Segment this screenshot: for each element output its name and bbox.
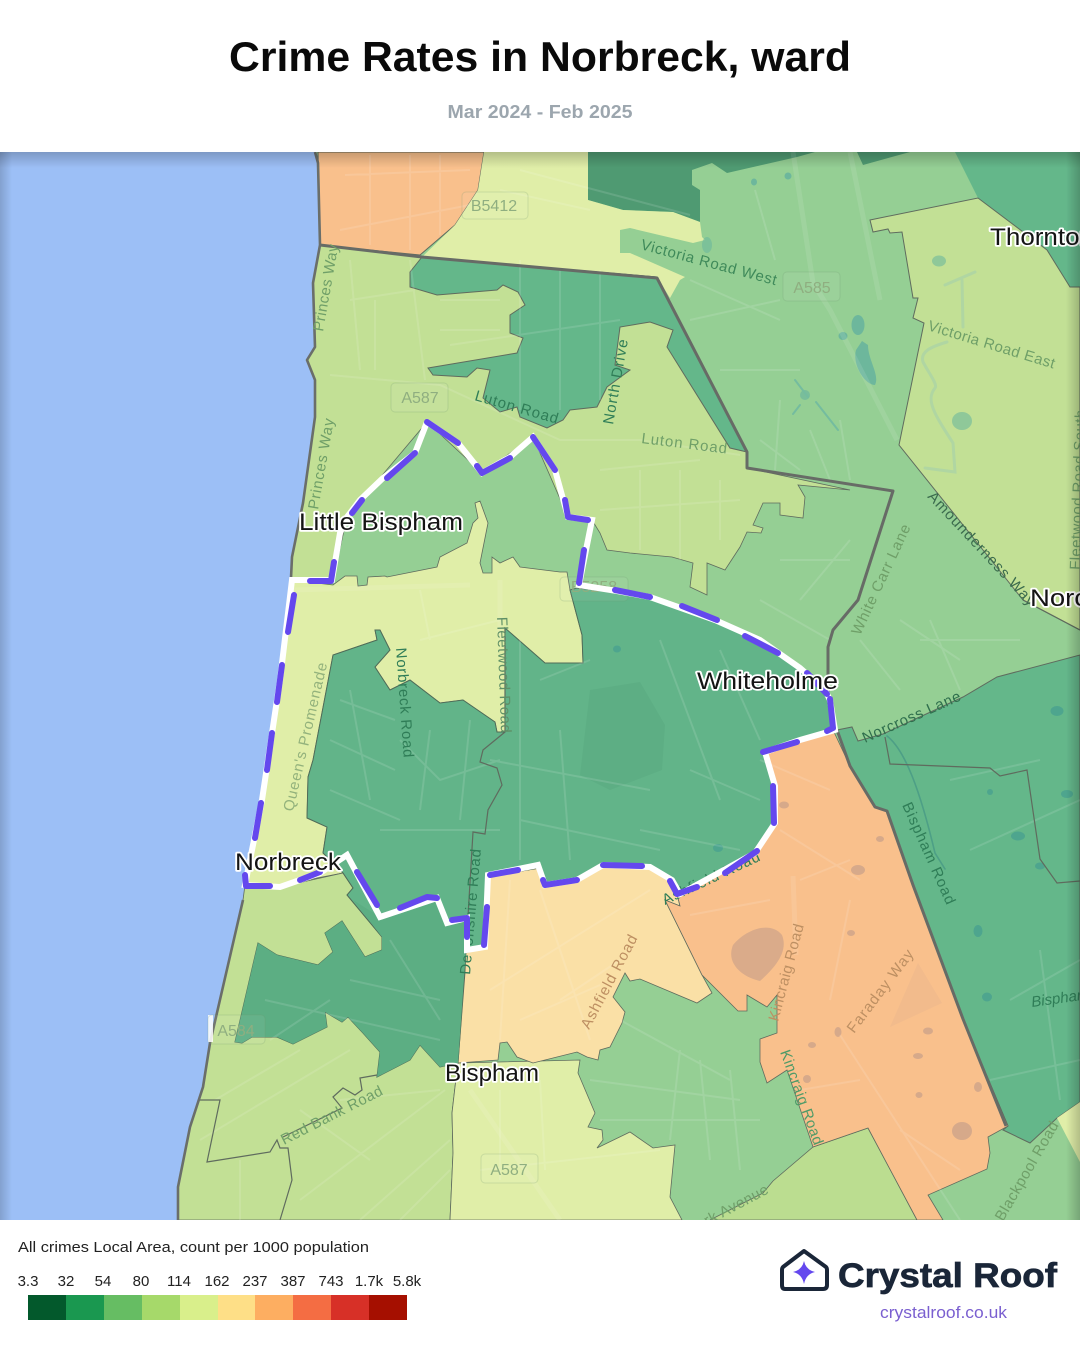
area: south-east light green [710,1128,917,1220]
legend value labels: 32 [58,1273,74,1290]
place labels: Bispham [445,1060,539,1087]
legend title: All crimes Local Area, count per 1000 population [18,1239,369,1256]
map edge shadows [0,152,1080,1220]
legend value labels [18,1273,422,1290]
road labels: North Drive [600,338,632,426]
ward boundary: purple dashes [245,422,833,945]
area: east dark green [837,655,1080,1143]
area: Luton Road dark green [410,257,747,452]
road labels: Victoria Road West [639,236,779,289]
subtitle: date range: Mar 2024 - Feb 2025 [448,101,632,122]
area: top pale yellow-green [422,152,705,298]
legend value labels: 237 [242,1273,268,1290]
road labels: Devonshire Road [457,848,485,975]
area: Ashfield pale orange [458,865,712,1063]
wide main roads [358,152,899,1220]
road labels: Luton Road [641,430,728,457]
road shields: A585 [793,280,831,297]
road labels: Norbreck Road [392,647,417,758]
road labels: Faraday Way [844,946,918,1036]
ponds and streams [613,172,1073,1002]
road shields: A584 [217,1023,255,1040]
brand name: Crystal Roof [838,1257,1058,1295]
ward boundary: white casing [245,422,835,950]
place labels: Little Bispham [299,509,463,536]
legend value labels: 80 [133,1273,149,1290]
legend value labels: 162 [204,1273,230,1290]
orange area darker patches [731,802,982,1140]
legend value labels: 5.8k [393,1273,422,1290]
area: south-west light green [178,873,458,1220]
road shields [208,192,840,1183]
road labels: Queen's Promenade [280,661,331,813]
panel: legend [18,1239,422,1320]
place labels: Whiteholme [697,668,838,695]
legend value labels: 1.7k [355,1273,384,1290]
road labels: Victoria Road East [926,318,1058,373]
road shields: B5258 [571,579,617,596]
area: top dark green sliver [857,152,910,165]
road network [200,155,1080,1220]
area: top orange [318,152,484,255]
area: top-centre dark green [588,152,815,222]
area: Norbreck pale yellow-green [245,501,583,887]
road labels: Bispham Road [898,800,959,907]
area: Thornton light green [870,198,1080,630]
road labels: Luton Road [473,388,560,428]
road labels: Kincraig Road [765,922,808,1023]
road shields: A587 [490,1162,528,1179]
road shields: B5412 [471,198,517,215]
title: Crime Rates in Norbreck, ward [229,33,851,80]
place labels: Norbreck [235,849,342,876]
legend colour scale [28,1295,407,1320]
road labels: Red Bank Road [278,1083,386,1149]
road labels: Princes Way [310,243,342,333]
area: top-right green [955,152,1080,287]
area: north-west light green [291,245,850,595]
road labels: Kincraig Road [776,1048,826,1147]
thick district boundary [320,245,1006,1126]
road labels: White Carr Lane [848,522,914,638]
sea [0,152,319,1220]
area: south dark shading [235,921,466,1077]
legend value labels: 3.3 [18,1273,38,1290]
road labels: Blackpool Road [992,1119,1062,1224]
legend value labels: 114 [167,1273,191,1290]
legend value labels: 54 [95,1273,111,1290]
road labels [278,236,1080,1239]
stream lines [793,272,975,869]
road labels: Ashfield Road [660,848,763,909]
road labels: Ashfield Road [578,932,641,1032]
panel: brand logo [782,1251,1058,1322]
area: ward dark green [235,588,835,1077]
road labels: Princes Way [305,417,338,511]
thin district boundaries [198,600,1080,1220]
land base: mid green areas [308,152,1080,1220]
website: crystalroof.co.uk [880,1303,1008,1322]
road labels: Norcross Lane [860,688,963,747]
area: south centre pale yellow-green [450,1060,682,1220]
place labels [235,224,1080,1087]
area: Whiteholme park patch [580,682,665,790]
road labels: Amounderness Way [924,488,1039,610]
area: far south-east pale corner [1057,1102,1080,1162]
icon: house with star [782,1251,827,1289]
legend value labels: 743 [318,1273,344,1290]
legend value labels: 387 [280,1273,306,1290]
road labels: Fleetwood Road [493,617,514,733]
road labels: Park Avenue [684,1181,771,1239]
area: Bispham orange [665,730,1008,1220]
coastline [178,152,320,1220]
road shields: A587 [401,390,439,407]
